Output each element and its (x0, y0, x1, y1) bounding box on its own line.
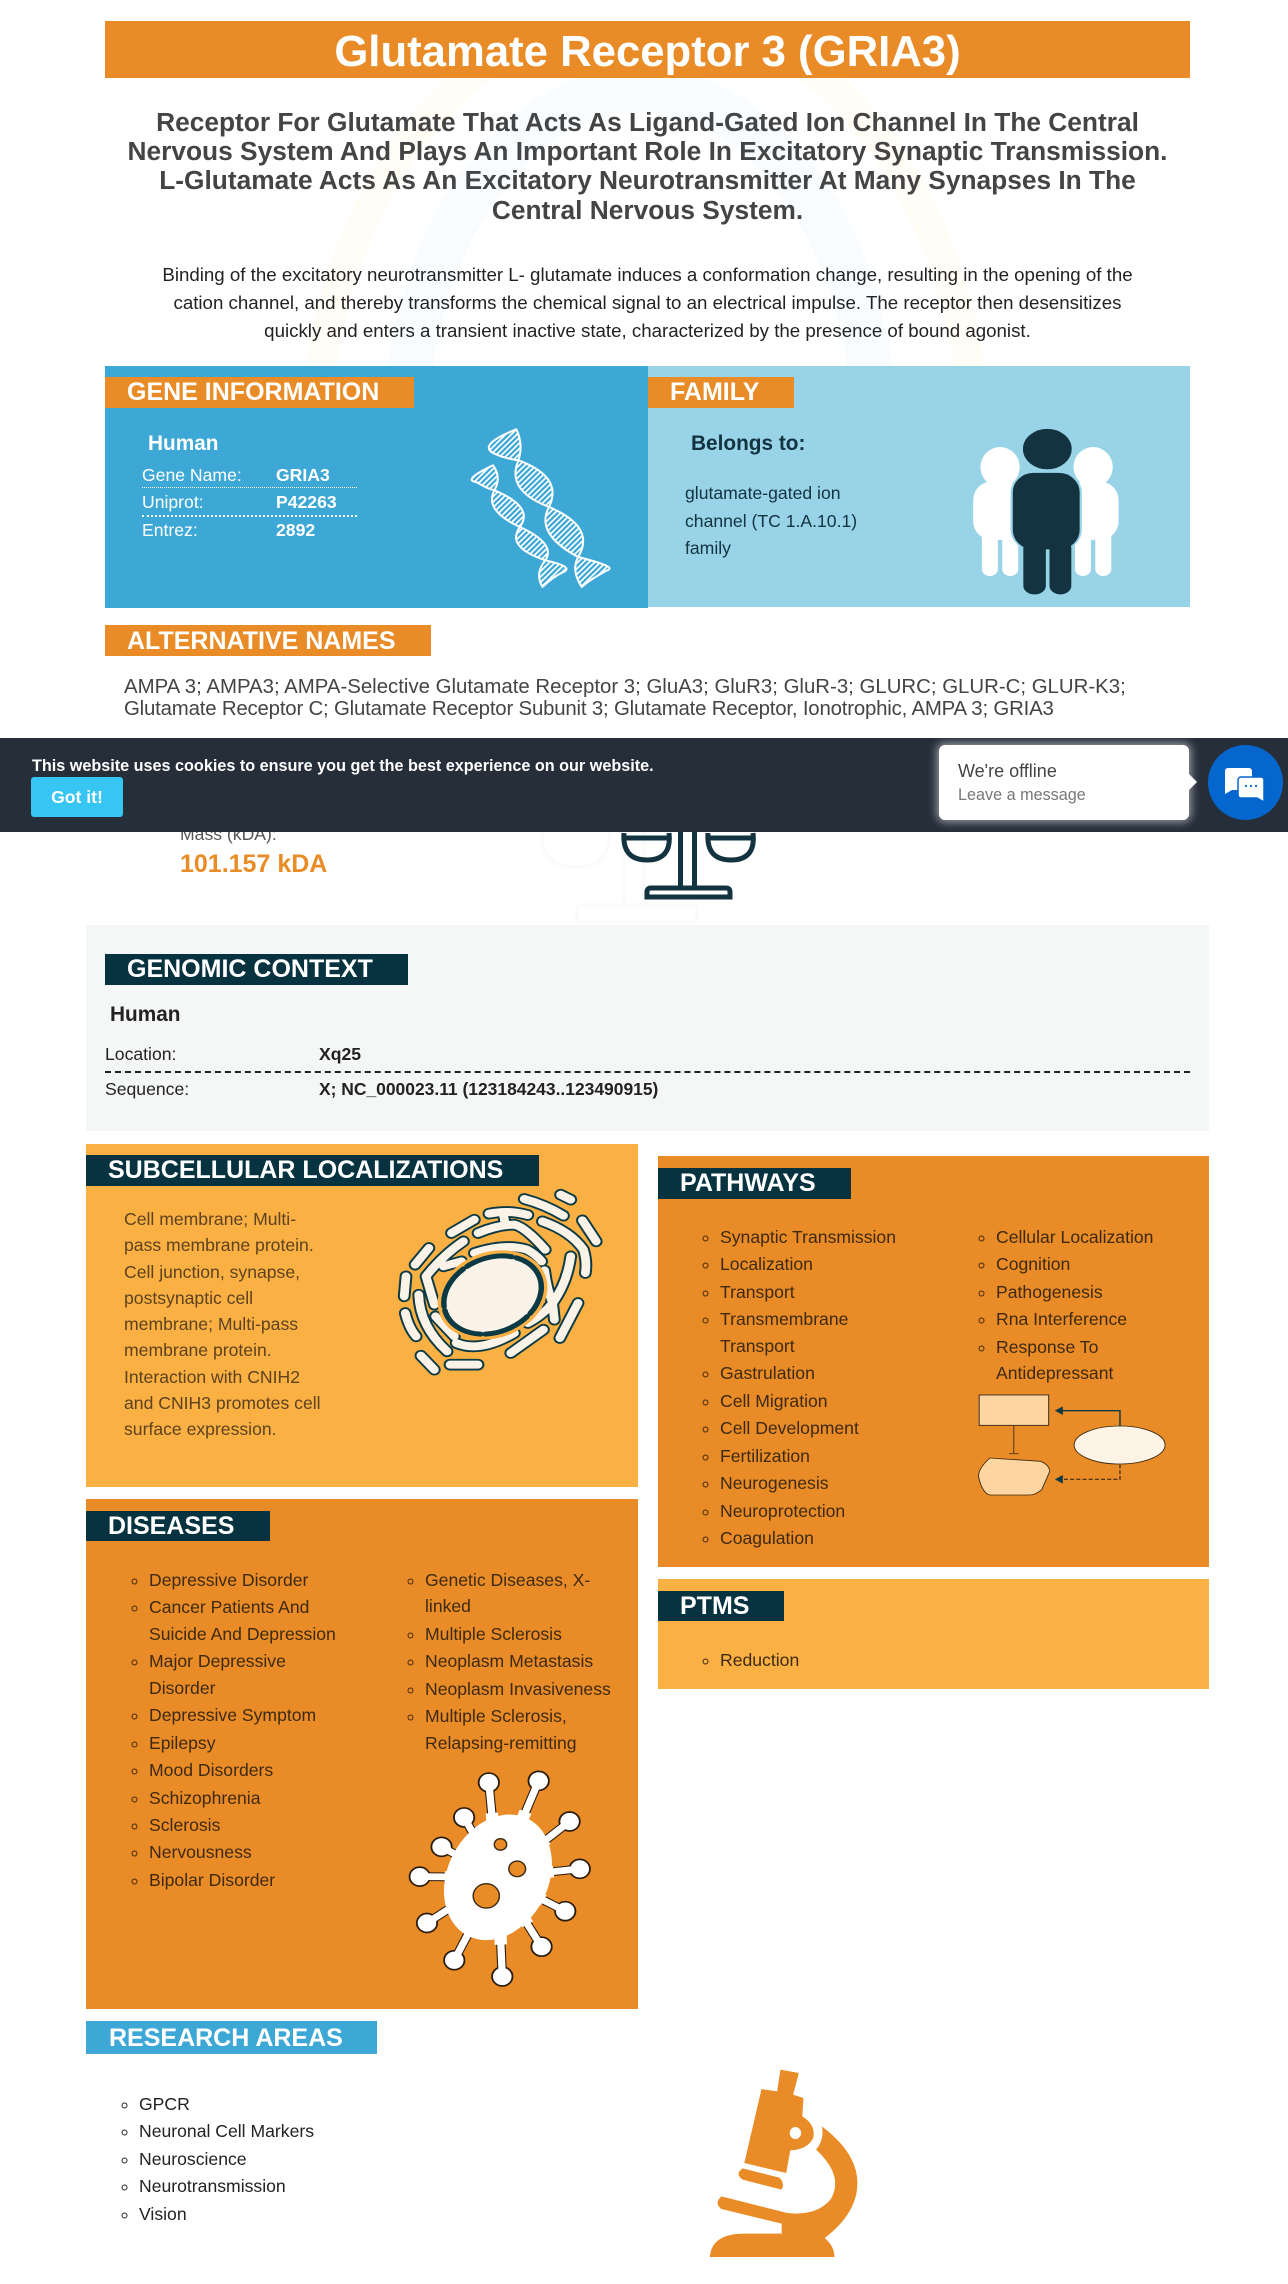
description: cation channel, and thereby transforms the chemical signal to an electrical impulse. The receptor then desensitizes (173, 292, 1122, 313)
family text (685, 483, 857, 558)
localization text: Interaction with CNIH2 (124, 1367, 300, 1387)
sequence row (105, 1079, 658, 1099)
pathway list column 2: Pathogenesis (996, 1282, 1103, 1302)
description: Binding of the excitatory neurotransmitter L- glutamate induces a conformation change, resulting in the opening of the (162, 264, 1133, 285)
panel: diseases (86, 1499, 638, 2009)
ptms list: Reduction (720, 1650, 799, 1670)
heading: family (648, 377, 794, 408)
localization text: Cell junction, synapse, (124, 1262, 300, 1282)
family text: glutamate-gated ion (685, 483, 841, 503)
icon: virus (408, 1770, 591, 1987)
localization text: and CNIH3 promotes cell (124, 1393, 321, 1413)
subtitle: Central Nervous System. (492, 195, 803, 225)
research areas list (122, 2094, 314, 2224)
icon: organelle (398, 1188, 603, 1376)
disease list column 1: Disorder (149, 1678, 215, 1698)
disease list column 1: Cancer Patients And (149, 1597, 309, 1617)
pathway list column 1: Localization (720, 1254, 813, 1274)
subtitle: L-Glutamate Acts As An Excitatory Neurotransmitter At Many Synapses In The (159, 165, 1136, 195)
gene table: Entrez: (142, 520, 198, 540)
disease list column 1: Major Depressive (149, 1651, 286, 1671)
disease list column 2: Neoplasm Invasiveness (425, 1679, 611, 1699)
localization text: membrane; Multi-pass (124, 1314, 298, 1334)
subtitle: Receptor For Glutamate That Acts As Ligand-Gated Ion Channel In The Central (156, 107, 1139, 137)
pathway list column 2: Antidepressant (996, 1363, 1113, 1383)
icon: scales (621, 832, 756, 900)
gene table: 2892 (276, 520, 315, 540)
heading: pathways: PATHWAYS (680, 1169, 816, 1197)
heading: genomic context: GENOMIC CONTEXT (127, 955, 373, 983)
sequence row: Sequence: (105, 1079, 189, 1099)
heading: diseases: DISEASES (108, 1512, 234, 1540)
cookie message: This website uses cookies to ensure you get the best experience on our website. (32, 757, 654, 775)
pathway list column 1: Synaptic Transmission (720, 1227, 896, 1247)
research areas list: Neuronal Cell Markers (139, 2121, 314, 2141)
chat status: We're offline (958, 761, 1057, 781)
localization text: pass membrane protein. (124, 1235, 314, 1255)
pathway list column 1: Fertilization (720, 1446, 810, 1466)
family text: family (685, 538, 731, 558)
location row (105, 1044, 361, 1064)
molecular mass label: Mass (kDA): (180, 824, 277, 844)
family text: channel (TC 1.A.10.1) (685, 510, 857, 530)
heading: ptms (658, 1591, 784, 1621)
description (162, 264, 1133, 341)
background watermark (306, 78, 984, 366)
localization text: postsynaptic cell (124, 1288, 253, 1308)
pathway list column 1: Cell Development (720, 1418, 859, 1438)
chat prompt: Leave a message (958, 786, 1086, 804)
heading: alternative names: ALTERNATIVE NAMES (127, 627, 396, 655)
pathway list column 1: Neuroprotection (720, 1501, 845, 1521)
localization text: Cell membrane; Multi- (124, 1209, 296, 1229)
gene table (142, 465, 357, 540)
disease list column 1: Depressive Disorder (149, 1570, 308, 1590)
research areas list: Vision (139, 2204, 187, 2224)
species label: Human (148, 432, 218, 455)
pathway list column 2: Cognition (996, 1254, 1070, 1274)
heading: gene information: GENE INFORMATION (127, 378, 379, 406)
research areas list: Neuroscience (139, 2149, 247, 2169)
heading: diseases (86, 1511, 270, 1541)
title: Glutamate Receptor 3 (GRIA3) (334, 27, 961, 76)
pathway list column 1 (702, 1227, 896, 1548)
gene table: GRIA3 (276, 465, 330, 485)
belongs to label: Belongs to: (691, 432, 805, 455)
disease list column 1: Schizophrenia (149, 1788, 260, 1808)
heading: ptms: PTMS (680, 1592, 749, 1620)
alternative names text: Glutamate Receptor C; Glutamate Receptor Subunit 3; Glutamate Receptor, Ionotrophic, AMPA 3; GRIA3 (124, 698, 1054, 720)
pathway list column 1: Cell Migration (720, 1391, 828, 1411)
disease list column 1: Suicide And Depression (149, 1624, 336, 1644)
description: quickly and enters a transient inactive state, characterized by the presence of bound agonist. (264, 320, 1031, 341)
icon: chat button (1208, 745, 1283, 820)
panel: genomic context (86, 925, 1209, 1131)
localization text: surface expression. (124, 1419, 277, 1439)
heading: family: FAMILY (670, 378, 759, 406)
molecular mass value: 101.157 kDA (180, 850, 327, 878)
pathway list column 2: Response To (996, 1337, 1098, 1357)
gene table: Uniprot: (142, 492, 204, 512)
localization text (124, 1209, 321, 1439)
chat bubble (939, 745, 1189, 820)
disease list column 2: Relapsing-remitting (425, 1733, 577, 1753)
subtitle (128, 107, 1168, 225)
panel: gene information (105, 366, 648, 608)
panel: subcellular localizations (86, 1144, 638, 1487)
location row: Xq25 (319, 1044, 361, 1064)
disease list column 1: Sclerosis (149, 1815, 220, 1835)
pathway list column 1: Coagulation (720, 1528, 814, 1548)
pathway list column 1: Transmembrane (720, 1309, 848, 1329)
pathway list column 1: Neurogenesis (720, 1473, 829, 1493)
heading: pathways (658, 1168, 851, 1199)
disease list column 1: Mood Disorders (149, 1760, 273, 1780)
disease list column 2: Genetic Diseases, X- (425, 1570, 590, 1590)
alternative names text: AMPA 3; AMPA3; AMPA-Selective Glutamate Receptor 3; GluA3; GluR3; GluR-3; GLURC; GLUR-C; GLUR-K3; (124, 676, 1126, 698)
pathway list column 2: Cellular Localization (996, 1227, 1153, 1247)
disease list column 1: Nervousness (149, 1842, 252, 1862)
localization text: membrane protein. (124, 1340, 272, 1360)
subtitle: Nervous System And Plays An Important Role In Excitatory Synaptic Transmission. (128, 136, 1168, 166)
heading: research areas: RESEARCH AREAS (109, 2024, 343, 2052)
cookie banner (0, 738, 1288, 832)
pathway list column 1: Transport (720, 1282, 795, 1302)
button: got it: Got it! (51, 787, 103, 807)
disease list column 1: Bipolar Disorder (149, 1870, 275, 1890)
disease list column 2: Neoplasm Metastasis (425, 1651, 593, 1671)
panel: ptms (658, 1579, 1209, 1689)
disease list column 2: Multiple Sclerosis (425, 1624, 562, 1644)
research areas list: Neurotransmission (139, 2176, 286, 2196)
sequence row: X; NC_000023.11 (123184243..123490915) (319, 1079, 658, 1099)
panel: family (648, 366, 1190, 607)
pathway list column 2: Rna Interference (996, 1309, 1127, 1329)
icon: pathway diagram (978, 1394, 1166, 1496)
gene table: Gene Name: (142, 465, 242, 485)
disease list column 2 (408, 1570, 611, 1753)
pathway list column 2 (978, 1227, 1153, 1383)
alternative names text (124, 676, 1126, 720)
research areas list: GPCR (139, 2094, 190, 2114)
disease list column 2: Multiple Sclerosis, (425, 1706, 567, 1726)
icon: dna helix (470, 428, 610, 588)
species label: Human (110, 1003, 180, 1026)
pathway list column 1: Gastrulation (720, 1363, 815, 1383)
title (105, 21, 1190, 78)
disease list column 2: linked (425, 1596, 471, 1616)
heading: subcellular localizations: SUBCELLULAR LOCALIZATIONS (108, 1156, 503, 1184)
heading: research areas (86, 2021, 377, 2054)
panel: pathways (658, 1156, 1209, 1567)
button: got it (31, 777, 123, 817)
icon: microscope (710, 2070, 858, 2257)
disease list column 1: Epilepsy (149, 1733, 216, 1753)
icon: people (973, 428, 1119, 594)
pathway list column 1: Transport (720, 1336, 795, 1356)
location row: Location: (105, 1044, 176, 1064)
disease list column 1: Depressive Symptom (149, 1705, 316, 1725)
disease list column 1 (132, 1570, 336, 1890)
gene table: P42263 (276, 492, 337, 512)
